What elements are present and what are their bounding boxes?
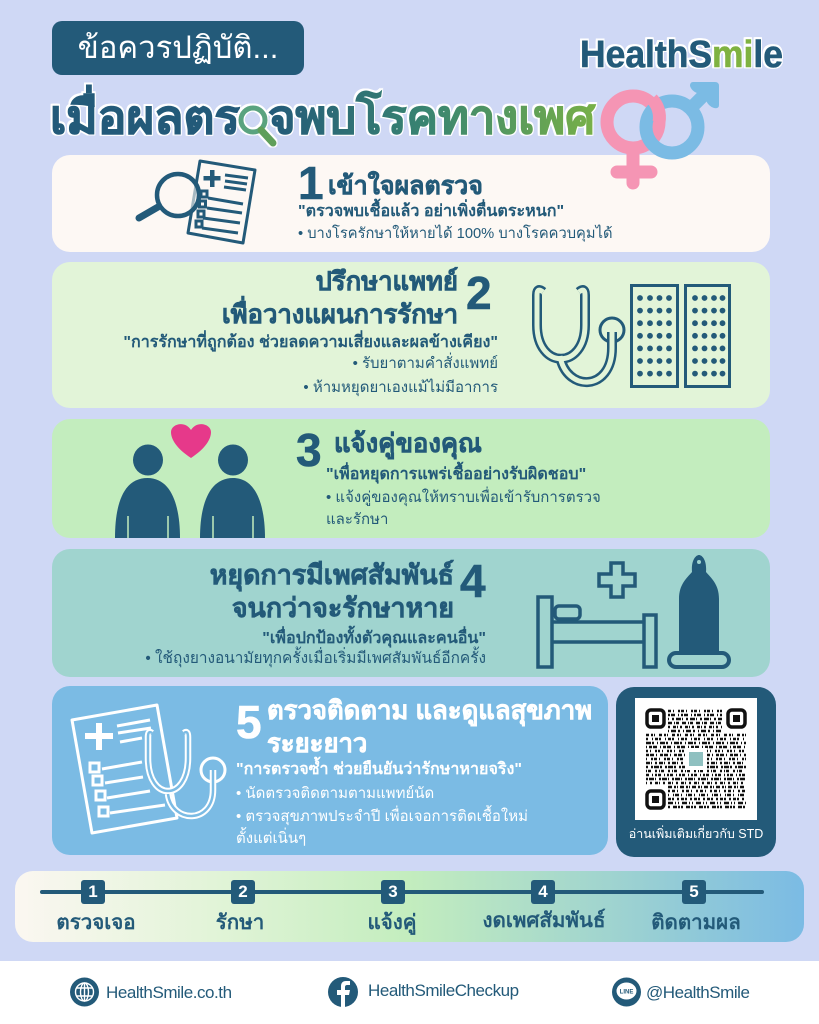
step 1 quote: "ตรวจพบเชื้อแล้ว อย่าเพิ่งตื่นตระหนก"	[298, 202, 564, 220]
step 5 heading	[267, 697, 592, 758]
step 5 heading: ระยะยาว	[267, 730, 367, 758]
timeline label 2: รักษา	[216, 911, 264, 934]
step 5 bullets: ตั้งแต่เนิ่นๆ	[236, 830, 306, 847]
step 4 heading: หยุดการมีเพศสัมพันธ์	[210, 560, 454, 590]
icon: checklist and stethoscope	[70, 704, 226, 834]
step 5 bullets: • ตรวจสุขภาพประจำปี เพื่อเจอการติดเชื้อใหม่	[236, 808, 528, 824]
step 2 bullets: • ห้ามหยุดยาเองแม้ไม่มีอาการ	[303, 379, 498, 396]
step 2 heading: เพื่อวางแผนการรักษา	[222, 301, 458, 329]
step 2 bullets: • รับยาตามคำสั่งแพทย์	[353, 355, 498, 372]
step 3 bullets: • แจ้งคู่ของคุณให้ทราบเพื่อเข้ารับการตรวจ	[326, 489, 601, 506]
icon: facebook	[328, 977, 358, 1007]
panel: step 2	[52, 262, 770, 408]
icon: line	[612, 978, 641, 1006]
step 2 number: 2	[466, 267, 492, 319]
icon: pill packs	[630, 284, 731, 388]
step 1 heading: เข้าใจผลตรวจ	[328, 172, 483, 200]
timeline marker 5	[682, 880, 706, 904]
timeline label 3: แจ้งคู่	[368, 911, 416, 934]
step 4 heading: จนกว่าจะรักษาหาย	[232, 593, 454, 623]
panel: timeline	[15, 871, 804, 942]
timeline marker 1: 1	[88, 882, 98, 901]
timeline marker 2: 2	[238, 882, 248, 901]
icon: magnifier in heading	[241, 108, 273, 143]
step 2 bullets	[303, 352, 498, 396]
timeline marker 2	[231, 880, 255, 904]
step 3 bullets: และรักษา	[326, 511, 388, 528]
step 5 quote: "การตรวจซ้ำ ช่วยยืนยันว่ารักษาหายจริง"	[236, 760, 522, 778]
timeline marker 1	[81, 880, 105, 904]
timeline marker 3	[381, 880, 405, 904]
step 4 bullet: • ใช้ถุงยางอนามัยทุกครั้งเมื่อเริ่มมีเพศสัมพันธ์อีกครั้ง	[145, 650, 486, 667]
step 4 number: 4	[460, 555, 486, 607]
step 5 bullets: • นัดตรวจติดตามตามแพทย์นัด	[236, 785, 434, 802]
icon: globe	[70, 978, 99, 1006]
icon: line: LINE	[620, 990, 633, 996]
step 5 heading: ตรวจติดตาม และดูแลสุขภาพ	[267, 697, 592, 725]
timeline marker 3: 3	[388, 882, 398, 901]
step 3 number: 3	[296, 424, 322, 476]
timeline label 4: งดเพศสัมพันธ์	[483, 909, 605, 932]
facebook text: HealthSmileCheckup	[368, 981, 519, 1000]
footer band	[0, 961, 819, 1024]
icon: gender symbols	[600, 82, 719, 190]
logo: HealthSmile	[580, 34, 783, 76]
step 2 heading: ปรึกษาแพทย์	[316, 268, 458, 296]
step 3 quote: "เพื่อหยุดการแพร่เชื้ออย่างรับผิดชอบ"	[326, 465, 586, 483]
line text: @HealthSmile	[646, 983, 750, 1002]
step 4 quote: "เพื่อปกป้องทั้งตัวคุณและคนอื่น"	[262, 629, 486, 647]
step 1 number: 1	[298, 157, 324, 209]
step 5 bullets	[236, 785, 528, 847]
timeline marker 4: 4	[538, 882, 548, 901]
website text: HealthSmile.co.th	[106, 983, 232, 1002]
icon: couple with heart	[115, 424, 265, 538]
icon: hospital bed with cross	[536, 561, 658, 669]
timeline marker 4	[531, 880, 555, 904]
panel: step 4	[52, 549, 770, 677]
timeline label 5: ติดตามผล	[651, 911, 741, 934]
main heading: จพบโรคทางเพศ	[268, 90, 596, 143]
step 2 heading	[222, 266, 458, 329]
step 1 bullet: • บางโรครักษาให้หายได้ 100% บางโรคควบคุมได้	[298, 226, 612, 242]
step 3 heading: แจ้งคู่ของคุณ	[334, 430, 482, 458]
main heading	[50, 82, 598, 148]
panel: step 5	[52, 686, 608, 855]
QR code	[635, 698, 757, 820]
step 3 bullets	[326, 486, 601, 528]
main heading: เมื่อผลตร	[50, 85, 240, 143]
panel: step 3	[52, 419, 770, 538]
step 5 number: 5	[236, 696, 262, 748]
timeline line	[40, 890, 764, 894]
panel: QR code	[616, 687, 776, 857]
title pill: ข้อควรปฏิบัติ...	[78, 30, 278, 65]
icon: condom	[667, 555, 731, 669]
panel: step 1	[52, 155, 770, 252]
title pill	[52, 21, 304, 75]
step 2 quote: "การรักษาที่ถูกต้อง ช่วยลดความเสี่ยงและผลข้างเคียง"	[123, 333, 498, 351]
QR caption: อ่านเพิ่มเติมเกี่ยวกับ STD	[629, 827, 763, 841]
timeline label 1: ตรวจเจอ	[56, 911, 136, 934]
icon: stethoscope	[532, 285, 626, 388]
icon: magnifier and report	[136, 160, 256, 244]
timeline marker 5: 5	[689, 882, 699, 901]
step 4 heading	[210, 560, 454, 623]
